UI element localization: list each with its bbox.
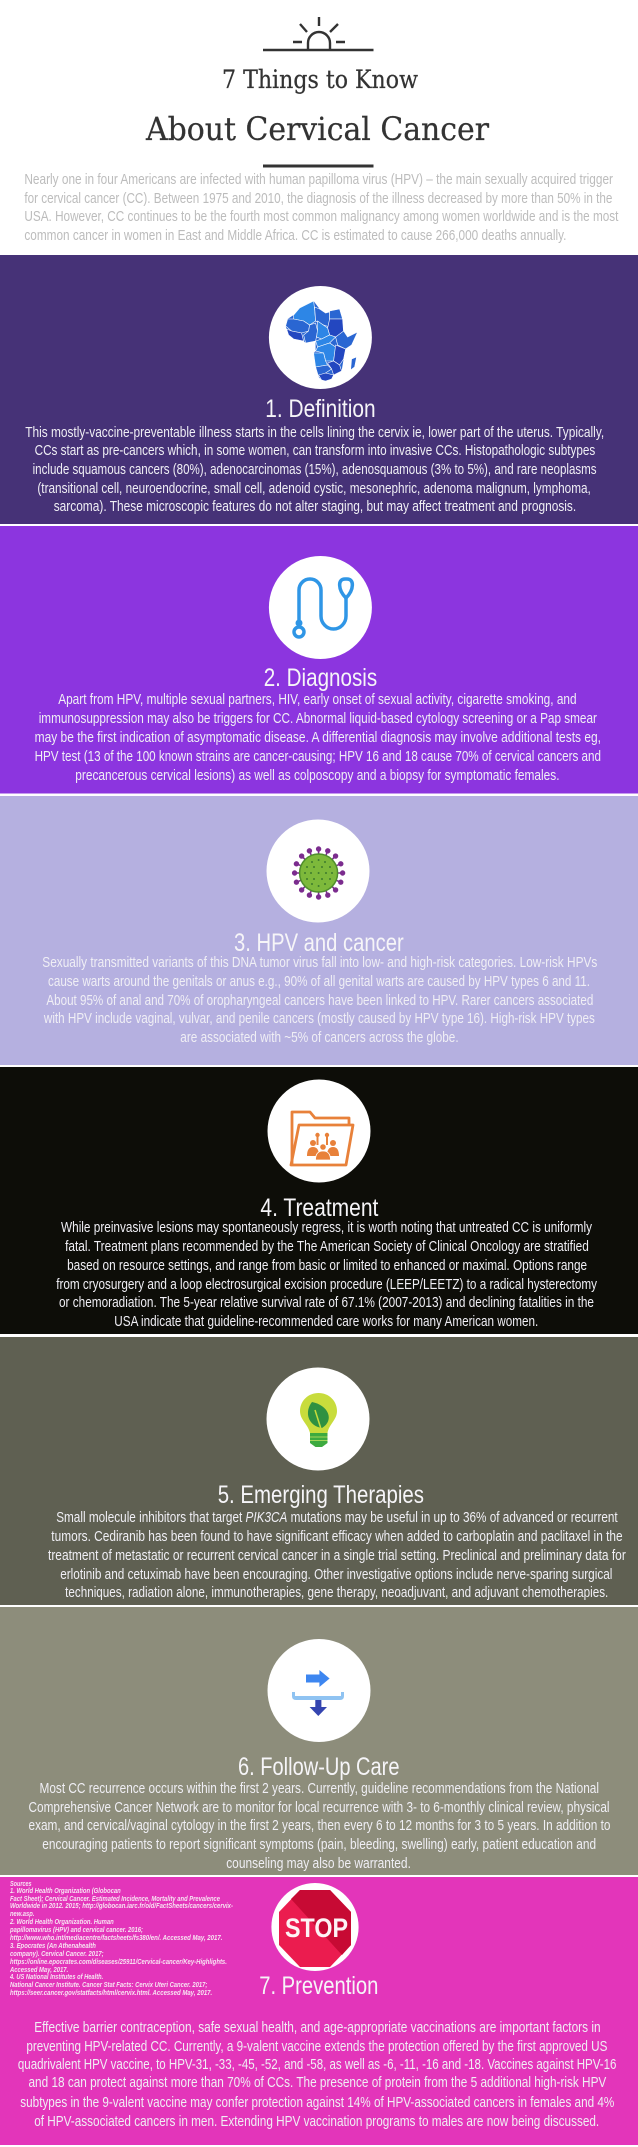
title underline: [263, 164, 374, 168]
sources list: Fact Sheet); Cervical Cancer. Estimated Incidence, Mortality and Prevalence: [10, 1894, 220, 1903]
icon: folder with people: [268, 1080, 370, 1182]
icon: stop sign: [271, 1883, 359, 1971]
sources list: [9, 1879, 233, 1997]
body: prevention: [18, 2019, 616, 2130]
sources list: Accessed May, 2017.: [9, 1965, 68, 1974]
icon: Africa map: [269, 286, 372, 389]
body: follow-up care: [28, 1780, 610, 1872]
panel background: diagnosis: [0, 526, 638, 794]
icon: virus: [266, 820, 370, 922]
sources list: papillomavirus (HPV) and cervical cancer. 2016;: [9, 1925, 143, 1934]
sources list: Worldwide in 2012. 2015; http://globocan.iarc.fr/old/FactSheets/cancers/cervix-: [10, 1901, 233, 1910]
panel: diagnosis: [0, 526, 638, 794]
panel: definition: [0, 255, 638, 524]
icon: arrows and tray: [268, 1639, 370, 1742]
heading: prevention: 7. Prevention: [259, 1972, 378, 2000]
body: emerging therapies: [48, 1509, 626, 1601]
title: About Cervical Cancer: [145, 110, 490, 148]
sources list: Sources: [10, 1879, 32, 1888]
panel background: prevention: [0, 1877, 638, 2145]
body: definition: [25, 424, 604, 515]
body: HPV and cancer: [42, 954, 597, 1046]
heading: diagnosis: 2. Diagnosis: [264, 664, 377, 692]
icon: sunrise: [263, 17, 374, 50]
heading: emerging therapies: 5. Emerging Therapies: [218, 1481, 424, 1509]
icon: light bulb with leaf: [266, 1368, 370, 1470]
panel: prevention: [0, 1877, 638, 2145]
sources list: 2. World Health Organization. Human: [9, 1917, 114, 1926]
sources list: https://online.epocrates.com/diseases/25911/Cervical-cancer/Key-Highlights.: [10, 1957, 227, 1966]
title: 7 Things to Know: [222, 65, 419, 94]
sources list: National Cancer Institute. Cancer Stat Facts: Cervix Uteri Cancer. 2017;: [10, 1980, 208, 1989]
title: [145, 65, 490, 148]
body: treatment: [56, 1219, 597, 1330]
sources list: 3. Epocrates (An Athenahealth: [10, 1941, 96, 1950]
sources list: https://seer.cancer.gov/statfacts/html/cervix.html. Accessed May, 2017.: [10, 1988, 212, 1997]
body: diagnosis: [35, 691, 601, 784]
sources list: 4. US National Institutes of Health.: [9, 1972, 103, 1981]
body: follow-up care: counseling may also be warranted.: [226, 1855, 411, 1872]
panel: HPV and cancer: [0, 796, 638, 1065]
body: HPV and cancer: are associated with ~5% of cancers across the globe.: [180, 1029, 459, 1046]
intro text: [24, 171, 619, 244]
heading: treatment: 4. Treatment: [260, 1194, 378, 1222]
panel: emerging therapies: [0, 1337, 638, 1605]
panel: treatment: [0, 1067, 638, 1334]
panel background: HPV and cancer: [0, 796, 638, 1065]
panel: follow-up care: [0, 1607, 638, 1875]
panel background: emerging therapies: [0, 1337, 638, 1605]
icon: stethoscope: [269, 556, 372, 659]
heading: follow-up care: 6. Follow-Up Care: [238, 1753, 400, 1781]
heading: definition: 1. Definition: [265, 395, 376, 423]
sources list: company). Cervical Cancer. 2017;: [10, 1949, 104, 1958]
sources list: 1. World Health Organization (Globocan: [10, 1886, 121, 1895]
panel background: follow-up care: [0, 1607, 638, 1875]
sources list: http://www.who.int/mediacentre/factsheets/fs380/en/. Accessed May, 2017.: [10, 1933, 222, 1942]
panel background: treatment: [0, 1067, 638, 1334]
panel background: definition: [0, 255, 638, 524]
icon: stop sign: STOP: [285, 1913, 348, 1943]
heading: HPV and cancer: 3. HPV and cancer: [234, 929, 404, 957]
sources list: new.asp.: [10, 1909, 34, 1918]
